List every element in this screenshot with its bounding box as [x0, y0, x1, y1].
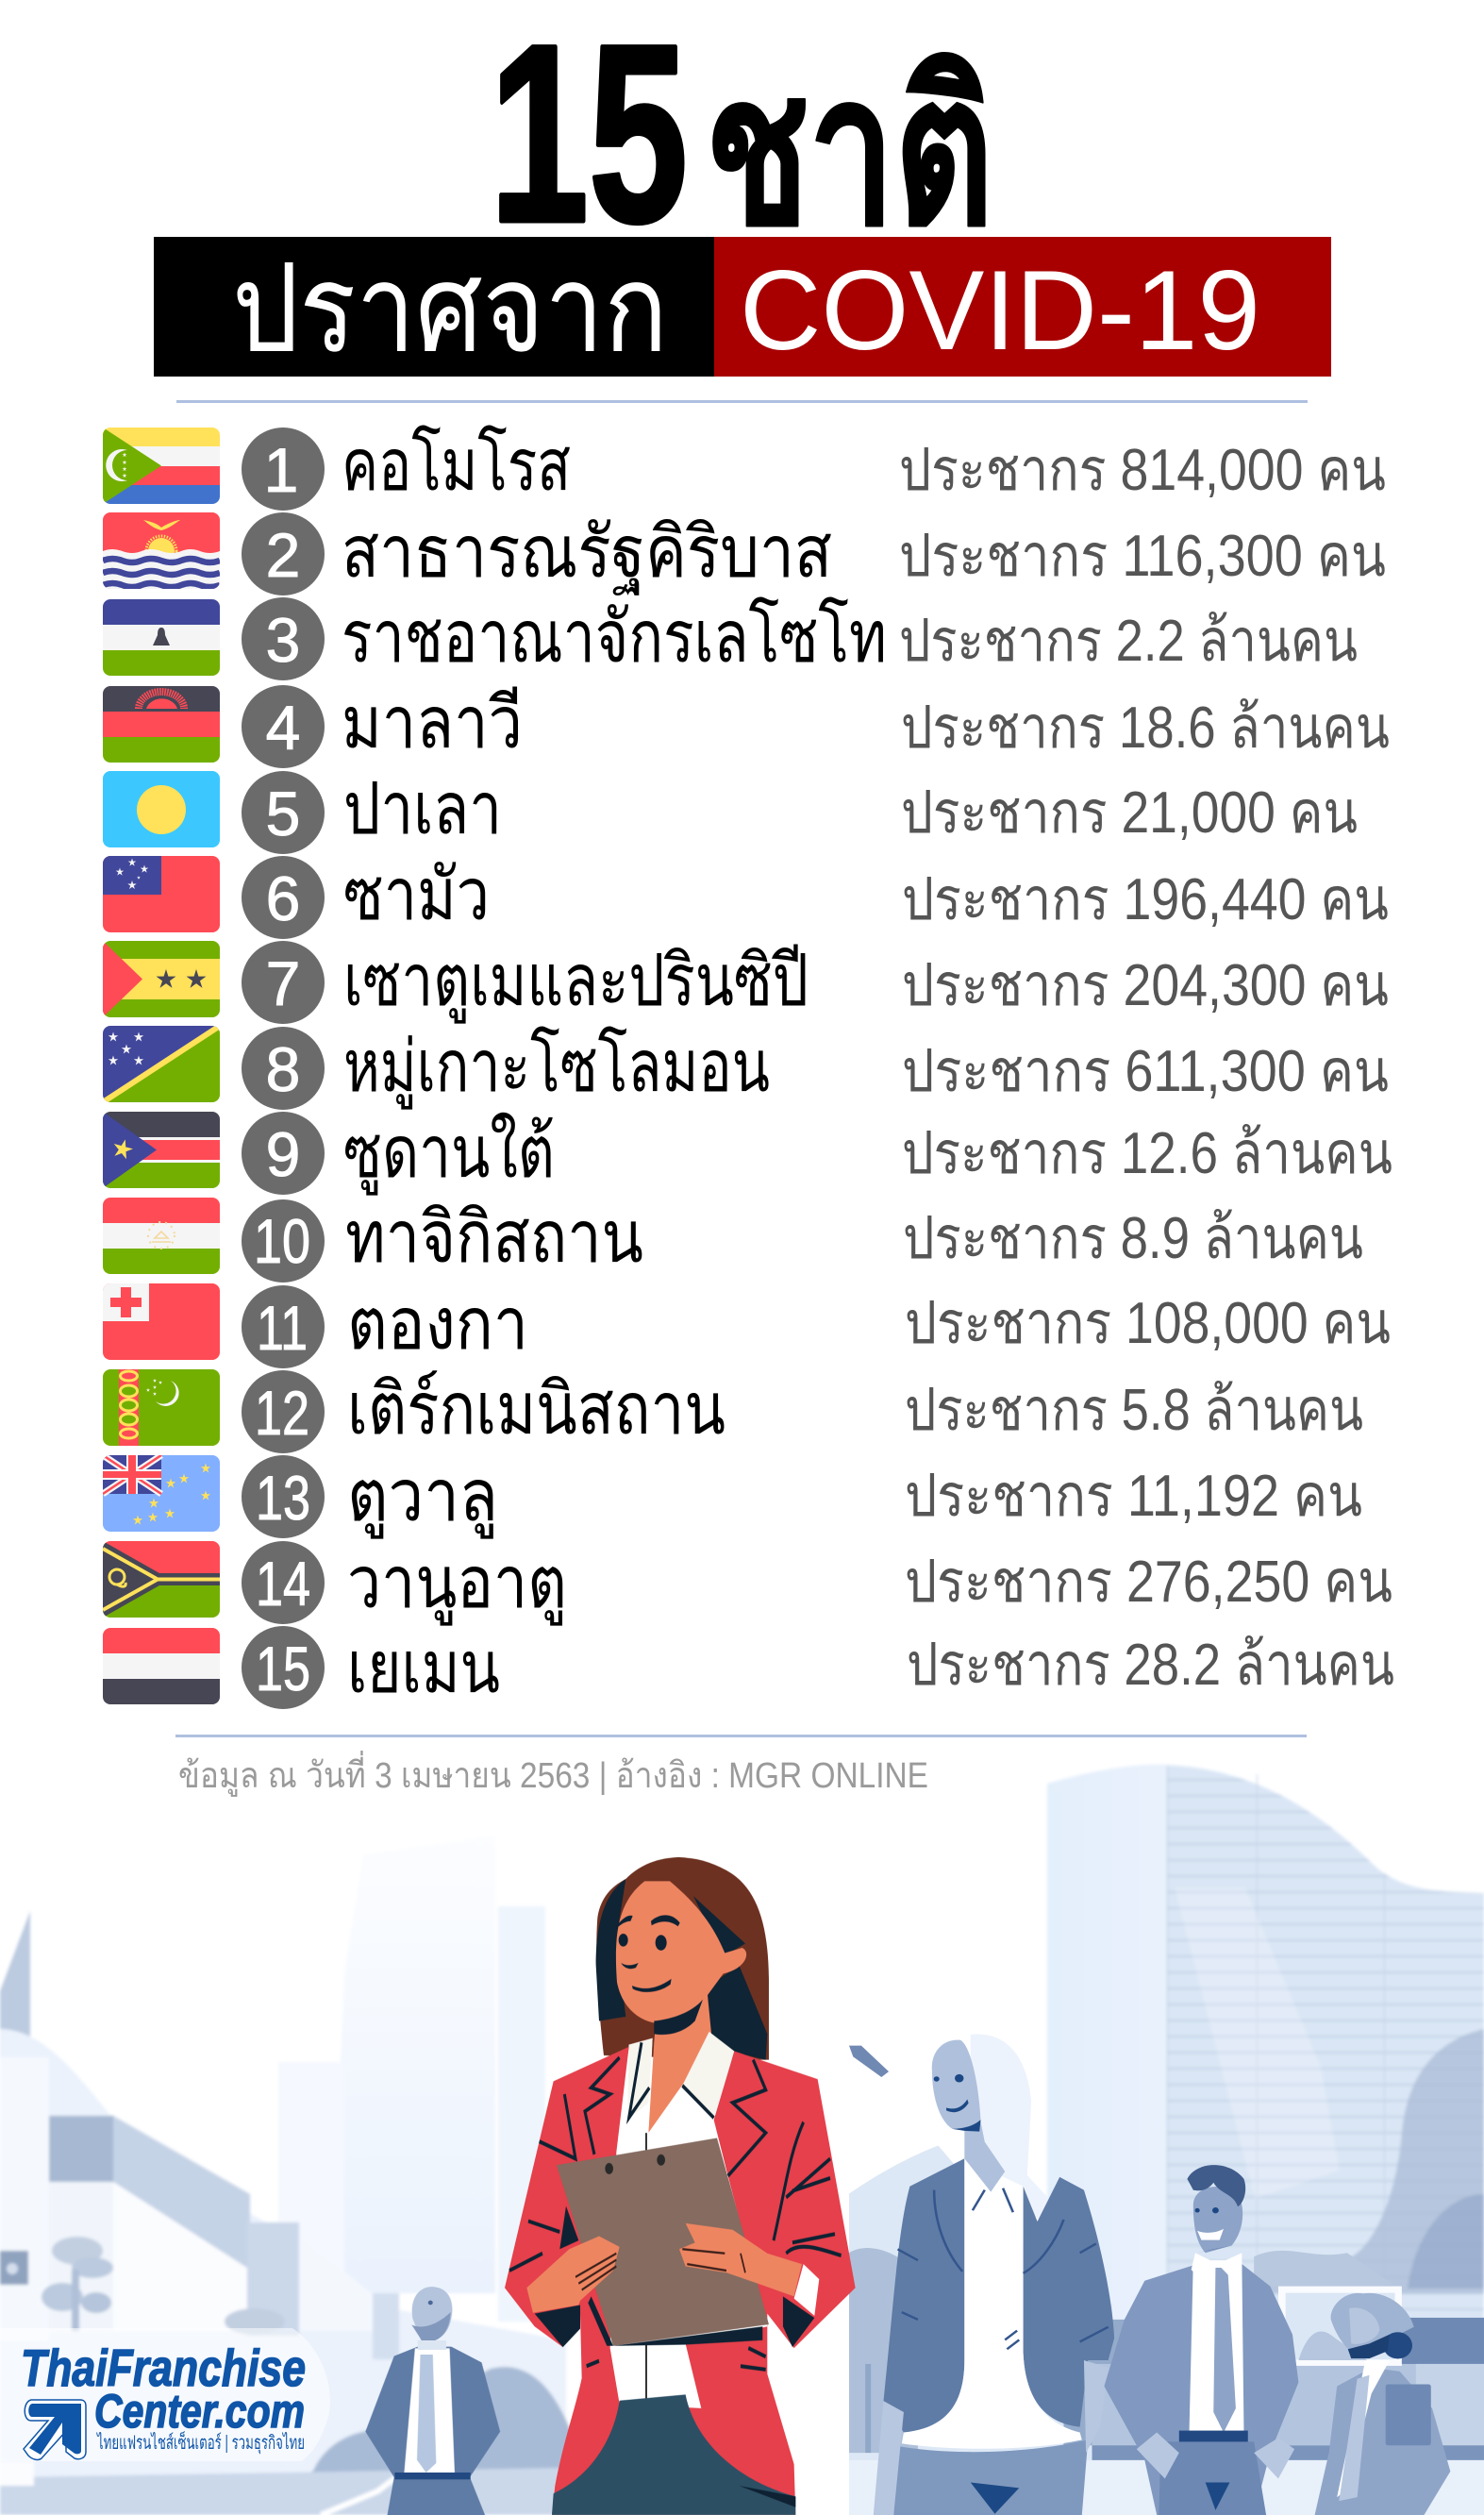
number badge 13: 13: [256, 1463, 310, 1533]
number badge 8: 8: [266, 1034, 300, 1104]
number badge 4: 4: [266, 693, 300, 763]
number badge 6: 6: [266, 863, 300, 933]
country name: ซูดานใต้: [343, 1112, 555, 1196]
country name: คอโมโรส: [342, 425, 571, 506]
population: ประชากร 21,000 คน: [901, 780, 1358, 846]
illustration: city background: [0, 1765, 1484, 2515]
number badge 9: 9: [266, 1119, 300, 1189]
population: ประชากร 611,300 คน: [902, 1039, 1389, 1104]
number badge 6: [242, 856, 325, 939]
population: ประชากร 108,000 คน: [905, 1291, 1391, 1356]
country name: ปาเลา: [343, 769, 502, 849]
heading banner: [154, 237, 1331, 377]
icon: flag of Yemen: [103, 1628, 220, 1704]
population: ประชากร 11,192 คน: [905, 1464, 1362, 1529]
number badge 11: 11: [257, 1293, 308, 1363]
population: ประชากร 5.8 ล้านคน: [905, 1378, 1363, 1443]
logo word Center.com: Center.com: [94, 2385, 305, 2438]
row 13: Tuvalu: [103, 1455, 1362, 1539]
woman sleeve cuffs: [535, 2206, 814, 2347]
clipboard: [557, 2138, 769, 2346]
row 12: Turkmenistan: [103, 1369, 1363, 1453]
title: 15 ชาติ: [490, 0, 993, 275]
logo: ThaiFranchise Center.com: [0, 2328, 330, 2461]
population: ประชากร 814,000 คน: [899, 438, 1386, 503]
woman dark hair shading: [596, 1879, 767, 2060]
icon: flag of Solomon Islands: [103, 1026, 220, 1102]
row 7: Sao Tome and Principe: [103, 941, 1389, 1024]
country name: วานูอาตู: [347, 1543, 567, 1626]
country name: ตองกา: [347, 1284, 528, 1365]
logo word ThaiFranchise: ThaiFranchise: [21, 2339, 306, 2397]
country name: สาธารณรัฐคิริบาส: [342, 512, 832, 595]
number badge 2: 2: [266, 520, 300, 590]
row 4: Malawi: [103, 683, 1390, 768]
illustration: woman in red blazer: [505, 1857, 856, 2515]
number badge 3: [242, 597, 325, 680]
icon: flag of Palau: [103, 771, 220, 847]
banner text: COVID-19: COVID-19: [740, 247, 1260, 374]
number badge 5: [242, 771, 325, 854]
population: ประชากร 196,440 คน: [902, 867, 1389, 932]
woman skirt: [552, 2394, 795, 2515]
number badge 1: 1: [264, 435, 298, 505]
number badge 8: [242, 1027, 325, 1110]
row 3: Lesotho: [103, 596, 1358, 680]
country name: ราชอาณาจักรเลโซโท: [342, 596, 887, 678]
icon: flag of Malawi: [103, 686, 220, 763]
population: ประชากร 204,300 คน: [902, 953, 1389, 1018]
banner black part: [154, 237, 714, 377]
number badge 15: [242, 1626, 325, 1709]
woman facial features: [616, 1915, 703, 2035]
row 10: Tajikistan: [103, 1198, 1363, 1283]
row 2: Kiribati: [103, 512, 1386, 595]
population: ประชากร 28.2 ล้านคน: [907, 1633, 1394, 1698]
number badge 9: [242, 1112, 325, 1195]
icon: flag of Comoros: [103, 428, 220, 504]
number badge 3: 3: [266, 605, 300, 675]
number badge 12: 12: [255, 1378, 309, 1448]
illustration: bearded man: [1315, 2293, 1450, 2515]
icon: flag of Samoa: [103, 856, 220, 932]
population: ประชากร 12.6 ล้านคน: [902, 1121, 1392, 1186]
icon: flag of Lesotho: [103, 599, 220, 676]
number badge 7: 7: [266, 948, 300, 1018]
woman face and neck: [616, 1881, 746, 2133]
illustration: man with tie: [1104, 2165, 1298, 2515]
number badge 15: 15: [256, 1634, 310, 1703]
row 9: South Sudan: [103, 1112, 1392, 1196]
country name: ทาจิกิสถาน: [345, 1198, 643, 1278]
number badge 10: 10: [254, 1206, 310, 1276]
country name: เติร์กเมนิสถาน: [347, 1369, 725, 1450]
population: ประชากร 276,250 คน: [905, 1550, 1392, 1615]
population: ประชากร 116,300 คน: [899, 524, 1386, 589]
woman blazer lines: [509, 2042, 842, 2400]
icon: flag of Tajikistan: [103, 1198, 220, 1274]
woman blazer: [505, 2047, 856, 2515]
number badge 4: [242, 685, 325, 768]
row 8: Solomon Islands: [103, 1026, 1389, 1110]
number badge 5: 5: [266, 779, 300, 848]
country name: หมู่เกาะโซโลมอน: [343, 1026, 770, 1110]
number badge 2: [242, 512, 325, 595]
number badge 13: [242, 1455, 325, 1538]
row 6: Samoa: [103, 855, 1389, 939]
icon: flag of Vanuatu: [103, 1541, 220, 1618]
icon: flag of Turkmenistan: [103, 1369, 220, 1446]
country name: ซามัว: [343, 855, 490, 935]
icon: flag of South Sudan: [103, 1112, 220, 1188]
row 11: Tonga: [103, 1283, 1391, 1368]
logo backing panel: [0, 2328, 330, 2461]
number badge 14: 14: [256, 1549, 310, 1618]
logo arrow: [24, 2400, 86, 2459]
country name: ตูวาลู: [347, 1456, 498, 1539]
banner red part: [714, 237, 1331, 377]
row 1: Comoros: [103, 425, 1386, 511]
row 15: Yemen: [103, 1626, 1394, 1709]
number badge 1: [242, 428, 325, 511]
country name: เยเมน: [347, 1628, 500, 1708]
population: ประชากร 2.2 ล้านคน: [899, 609, 1358, 674]
woman hands: [526, 2237, 620, 2313]
woman shirt: [616, 2038, 734, 2404]
number badge 11: [242, 1285, 325, 1368]
icon: flag of Sao Tome and Principe: [103, 941, 220, 1017]
population: ประชากร 8.9 ล้านคน: [903, 1206, 1363, 1271]
title word ชาติ: ชาติ: [706, 35, 993, 267]
country name: เซาตูเมและปรินซิปี: [343, 941, 809, 1024]
illustration: woman in grey blazer: [874, 2035, 1114, 2515]
source note: ข้อมูล ณ วันที่ 3 เมษายน 2563 | อ้างอิง : MGR ONLINE: [178, 1751, 928, 1797]
population: ประชากร 18.6 ล้านคน: [901, 696, 1390, 761]
illustration: bald man on the left: [365, 2287, 500, 2515]
number badge 14: [242, 1541, 325, 1624]
icon: flag of Tonga: [103, 1283, 220, 1360]
row 14: Vanuatu: [103, 1541, 1392, 1626]
icon: flag of Kiribati: [103, 512, 220, 589]
logo tagline: ไทยแฟรนไชส์เซ็นเตอร์ | รวมธุรกิจไทย: [96, 2430, 305, 2455]
row 5: Palau: [103, 769, 1358, 854]
country name: มาลาวี: [342, 683, 523, 763]
number badge 7: [242, 941, 325, 1024]
icon: flag of Tuvalu: [103, 1455, 220, 1532]
banner text: ปราศจาก: ปราศจาก: [232, 240, 668, 377]
illustration: right-side scenery: [849, 2046, 1484, 2515]
woman hair: [596, 1857, 769, 2060]
